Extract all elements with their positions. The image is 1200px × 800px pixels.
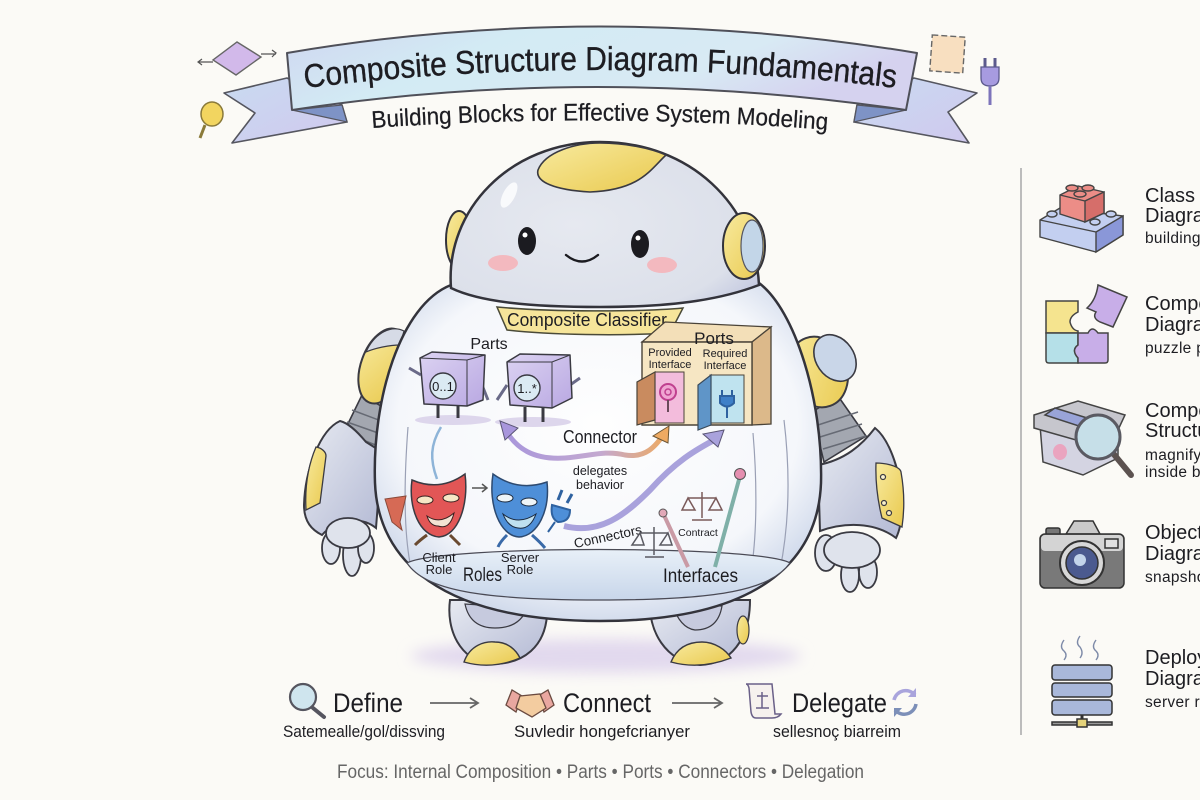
scales icon lower: [632, 527, 672, 557]
inner glass contours: [405, 420, 788, 570]
connectors label: Connectors: [573, 522, 643, 551]
part cube 0..1: [409, 352, 491, 425]
icon: dashed orange rectangle: [930, 35, 965, 73]
delegate caption: sellesnoç biarreim: [773, 722, 901, 741]
item: object diagram: [1040, 521, 1200, 588]
connector arrow: parts to provided port: [500, 421, 669, 458]
head top yellow patch: [538, 143, 666, 192]
server role mask: [492, 474, 547, 548]
main title: Composite Structure Diagram Fundamentals: [304, 46, 896, 88]
icon: magnifier: [290, 684, 324, 717]
sidebar divider: [1020, 168, 1022, 735]
icon: camera: [1040, 521, 1124, 588]
right foot: [650, 600, 750, 665]
client role label: Role: [426, 562, 452, 577]
interfaces label: Interfaces: [663, 566, 738, 587]
server role label: Role: [507, 562, 533, 577]
right arm: [812, 396, 904, 592]
banner left tail: [224, 78, 347, 143]
icon: purple plug: [981, 58, 999, 105]
role link strokes: [432, 427, 441, 479]
item: deployment diagram: [1052, 636, 1200, 727]
icon: box with magnifier: [1034, 401, 1131, 475]
connect heading: Connect: [563, 688, 651, 718]
part cube 0..1: 0..1: [432, 379, 454, 394]
arrow: [672, 698, 722, 708]
server plug: [548, 490, 572, 532]
item: component diagram: [1046, 285, 1200, 363]
client role mask: [411, 474, 466, 545]
define caption: Satemealle/gol/dissving: [283, 722, 445, 741]
connector label: Connector: [563, 427, 637, 447]
step: delegate: [746, 684, 916, 741]
icon: handshake: [506, 690, 554, 717]
icon: yellow lollipop key: [200, 102, 223, 138]
scales icon upper: [682, 492, 722, 520]
ground shadow: [411, 639, 801, 673]
item: composite structure diagram: [1034, 400, 1200, 481]
glass body: [375, 283, 821, 621]
provided interface label: Interface: [649, 359, 691, 371]
banner right tail: [854, 78, 977, 143]
subtitle: Building Blocks for Effective System Modeling: [372, 102, 828, 134]
class diagram text: Class: [1145, 185, 1195, 207]
icon: recycle arrows: [894, 688, 916, 717]
ports box: [637, 322, 771, 430]
required interface label: Interface: [704, 360, 746, 372]
banner main ribbon: [287, 26, 917, 110]
step: define: [283, 684, 445, 741]
client role label: Client: [422, 550, 456, 565]
define heading: Define: [333, 688, 403, 718]
right shoulder: [778, 327, 865, 416]
part cube 1..*: 1..*: [517, 381, 537, 396]
head dome: [451, 142, 759, 307]
roles label: Roles: [463, 565, 502, 586]
body floor: [407, 550, 790, 600]
provided port door: [637, 372, 684, 425]
icon: scroll with scales: [746, 684, 781, 718]
role arrow: [472, 484, 487, 492]
left shoulder: [349, 322, 417, 410]
left foot: [449, 600, 547, 665]
icon: puzzle pieces: [1046, 285, 1127, 363]
right sidebar: [1020, 168, 1200, 735]
robot character: [304, 142, 904, 673]
left ear: [446, 211, 472, 269]
required port door: [698, 375, 744, 430]
delegates behavior label: delegates: [573, 464, 627, 478]
robot face: [488, 180, 677, 273]
connect caption: Suvledir hongefcrianyer: [514, 722, 690, 741]
focus footer: Focus: Internal Composition • Parts • Ports • Connectors • Delegation: [337, 762, 864, 783]
process steps row: [283, 684, 916, 741]
left arm: [304, 395, 388, 576]
icon: server rack with steam: [1052, 636, 1112, 727]
title banner: [223, 26, 978, 144]
right ear: [723, 213, 765, 279]
provided interface label: Provided: [648, 347, 692, 359]
interface sticks: [659, 468, 746, 567]
item: class diagram: [1040, 185, 1200, 252]
required interface label: Required: [703, 348, 747, 360]
icon: diamond with arrows: [198, 42, 276, 75]
icon: lego bricks: [1040, 185, 1123, 252]
part cube 1..*: [495, 354, 580, 427]
composite classifier label: Composite Classifier: [507, 310, 667, 330]
parts label: Parts: [470, 336, 508, 353]
contract label: Contract: [678, 527, 718, 539]
delegates behavior label: behavior: [576, 478, 624, 492]
composite classifier label: [497, 307, 683, 335]
parts group: [409, 336, 580, 427]
server role label: Server: [501, 550, 540, 565]
banner left fold: [292, 105, 347, 122]
delegate heading: Delegate: [792, 688, 887, 718]
banner right fold: [854, 105, 906, 122]
connector arrow: server role to required port: [564, 430, 724, 528]
arrow: [430, 698, 478, 708]
ports label: Ports: [694, 329, 734, 348]
step: connect: [506, 688, 690, 741]
small client mask: [385, 496, 406, 530]
